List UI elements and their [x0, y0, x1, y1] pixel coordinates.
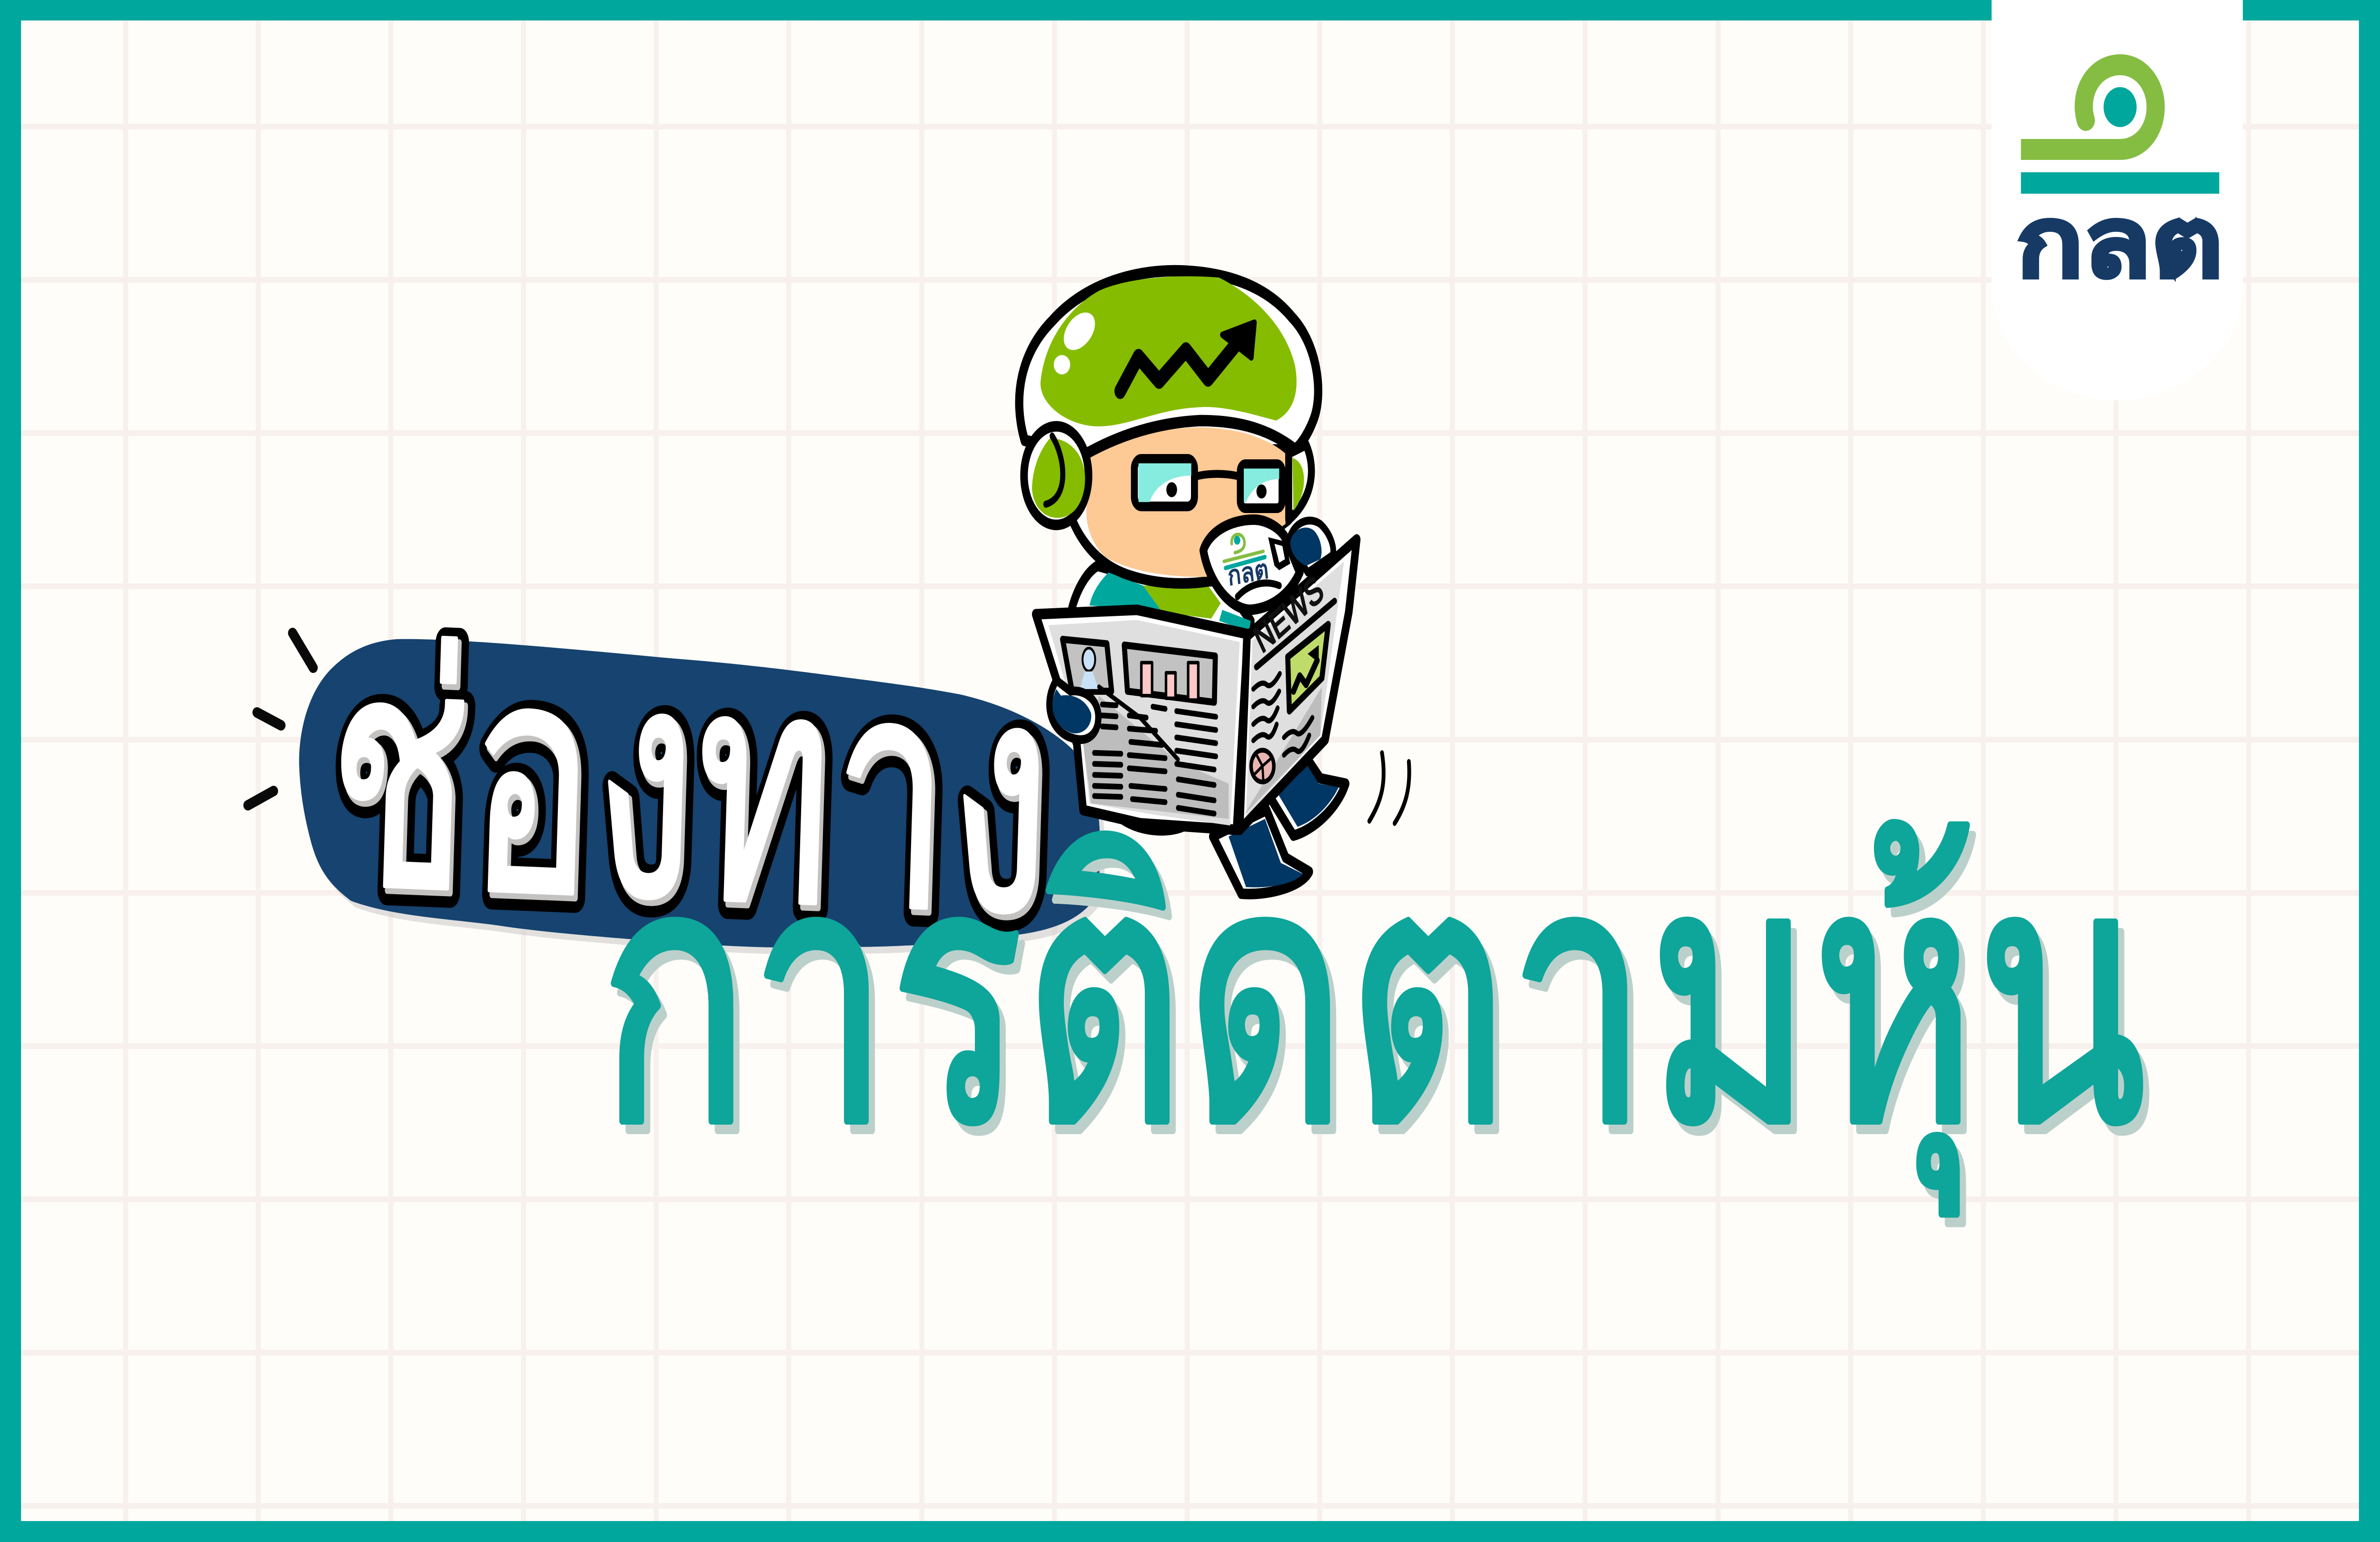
logo wordmark: กลต [2016, 188, 2223, 297]
body [1072, 566, 1251, 832]
photo box [1062, 639, 1111, 691]
heading: first line: ช่องทาง [326, 595, 1060, 986]
head [1072, 427, 1289, 583]
helmet [1019, 271, 1318, 454]
right page [1240, 539, 1357, 830]
left page [1036, 610, 1248, 830]
logo panel [1992, 0, 2243, 400]
pie chart [1251, 750, 1274, 782]
text lines [1094, 687, 1216, 814]
heading: first line: ช่องทาง [323, 591, 1057, 981]
hand holding mug [1289, 521, 1333, 573]
navy blob behind heading [299, 639, 1105, 954]
green chart picture [1288, 624, 1328, 711]
headphone right [1289, 445, 1311, 520]
left hand [1050, 680, 1098, 740]
coffee mug with logo [1203, 520, 1300, 610]
heading: first line: ช่องทาง [326, 595, 1060, 986]
NEWS masthead: NEWS [1249, 567, 1329, 661]
glasses [1134, 459, 1282, 508]
sparkle marks [248, 633, 313, 805]
legs [1213, 760, 1346, 894]
headphone left [1024, 426, 1089, 525]
article squiggles [1253, 673, 1312, 755]
mascot reading newspaper [1019, 271, 1409, 894]
motion lines [1369, 753, 1409, 823]
bar chart box [1124, 645, 1215, 702]
newspaper [1036, 539, 1357, 830]
coffee mug with logo: กลต [1226, 554, 1270, 592]
logo emblem: green ring with bar [2021, 65, 2219, 194]
